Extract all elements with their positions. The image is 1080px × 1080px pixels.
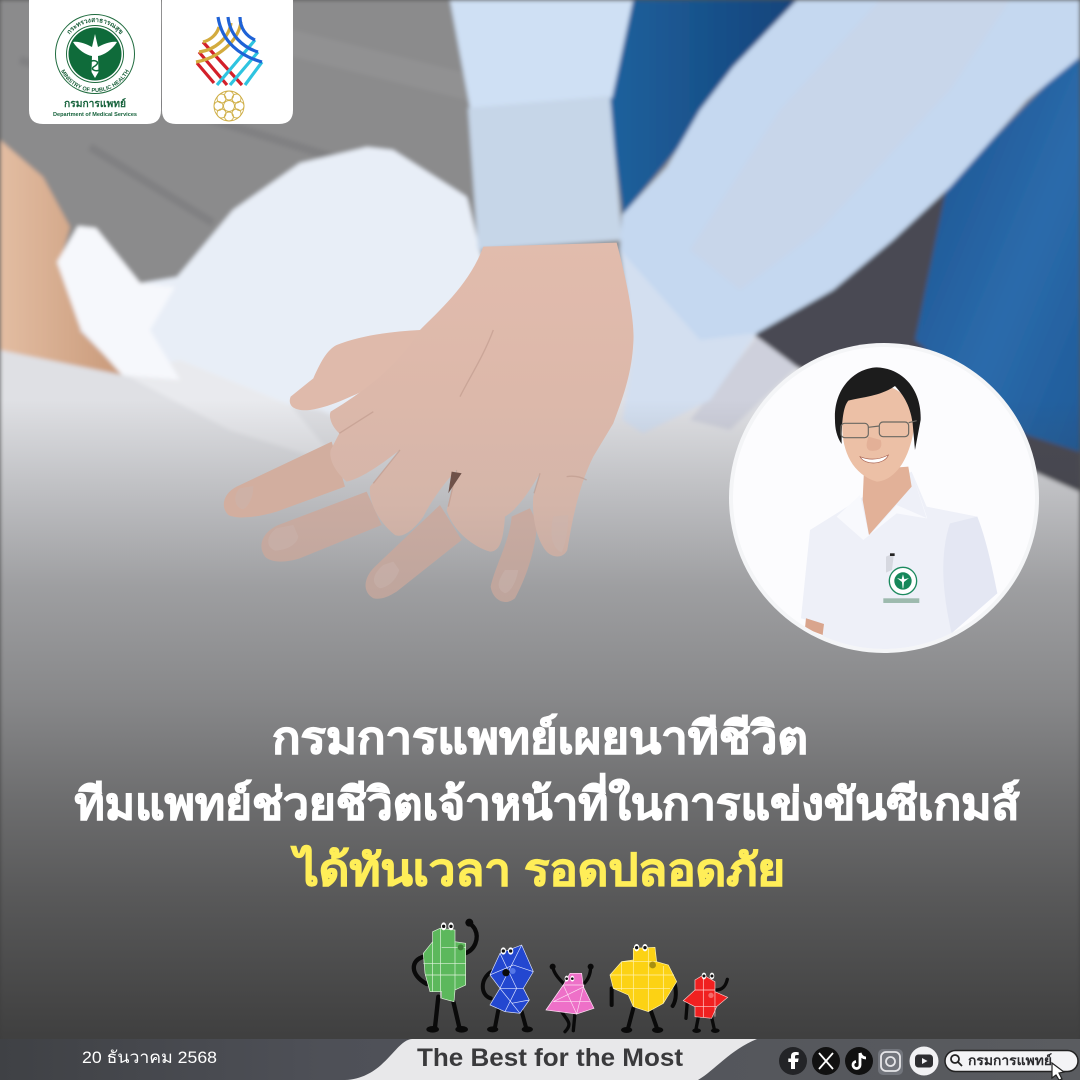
doctor figure	[801, 367, 997, 660]
search pill	[945, 1050, 1078, 1080]
gold flower	[214, 91, 244, 121]
sleeve cuff lower	[620, 250, 757, 433]
finger D	[491, 508, 537, 602]
department name english: Department of Medical Services	[53, 112, 137, 118]
collar	[837, 498, 927, 540]
shirt	[801, 472, 976, 649]
slogan ribbon	[345, 1039, 757, 1080]
MoPH seal: MINISTRY OF PUBLIC HEALTH	[61, 69, 129, 92]
icon: magnifier	[951, 1055, 962, 1066]
badge	[889, 567, 917, 595]
icon: facebook	[779, 1047, 807, 1075]
mascot: red	[683, 973, 728, 1033]
slogan: The Best for the Most	[417, 1044, 684, 1072]
patient arm	[0, 140, 122, 375]
sleeve shade	[943, 517, 997, 633]
hair	[835, 367, 921, 450]
sleeve middle	[690, 0, 1010, 290]
top hand thumb finger	[290, 330, 433, 410]
jeans right	[915, 50, 1080, 452]
shirt cuff	[57, 226, 180, 380]
jeans upper	[608, 0, 800, 215]
face	[842, 385, 915, 482]
right sleeve	[620, 0, 1080, 433]
shirt placket	[120, 360, 340, 465]
icon: cursor	[1052, 1063, 1064, 1080]
date: 20 ธันวาคม 2568	[82, 1048, 217, 1067]
smile	[860, 455, 888, 463]
department name: กรมการแพทย์	[64, 98, 126, 110]
glasses	[841, 421, 917, 438]
shadow gap	[740, 180, 1080, 500]
neck	[863, 467, 912, 535]
mascot: green	[414, 919, 477, 1033]
nails	[235, 486, 568, 593]
shoulder sleeve	[450, 0, 633, 108]
mascot: yellow	[610, 944, 677, 1033]
gap shadow	[448, 472, 462, 493]
heading line 1: กรมการแพทย์เผยนาทีชีวิต	[272, 713, 808, 763]
patient shirt lower	[0, 290, 1080, 1080]
knuckle creases	[339, 330, 587, 507]
shirt mound	[80, 147, 490, 480]
finger C	[366, 505, 462, 599]
nose	[867, 437, 881, 451]
sleeve cuff	[468, 96, 622, 250]
logo card: anniversary emblem	[162, 0, 293, 124]
icon: instagram	[878, 1049, 903, 1075]
MoPH seal	[55, 14, 135, 94]
forearm	[805, 618, 824, 635]
finger B	[261, 492, 382, 562]
top hand	[330, 243, 634, 556]
icon: tiktok	[845, 1047, 873, 1075]
heading line 3: ได้ทันเวลา รอดปลอดภัย	[291, 844, 785, 895]
doctor portrait	[729, 343, 1040, 660]
logo card: Department of Medical Services	[29, 0, 161, 124]
finger A	[224, 442, 345, 517]
mascot: pink	[546, 964, 594, 1032]
couch stripes	[20, 0, 480, 223]
icon: X	[812, 1047, 840, 1075]
shirt right lobe	[690, 337, 797, 430]
mascots	[414, 919, 728, 1033]
heading line 2: ทีมแพทย์ช่วยชีวิตเจ้าหน้าที่ในการแข่งขันซีเกมส์	[74, 773, 1020, 829]
hands	[224, 243, 634, 602]
footer bar	[0, 1039, 1080, 1080]
MoPH seal: กระทรวงสาธารณสุข	[68, 18, 123, 34]
bottom dark fade	[0, 400, 1080, 1040]
mascot: blue	[483, 945, 533, 1032]
icon: youtube	[910, 1046, 938, 1076]
search label: กรมการแพทย์	[968, 1053, 1052, 1068]
ribbon emblem	[196, 17, 262, 85]
